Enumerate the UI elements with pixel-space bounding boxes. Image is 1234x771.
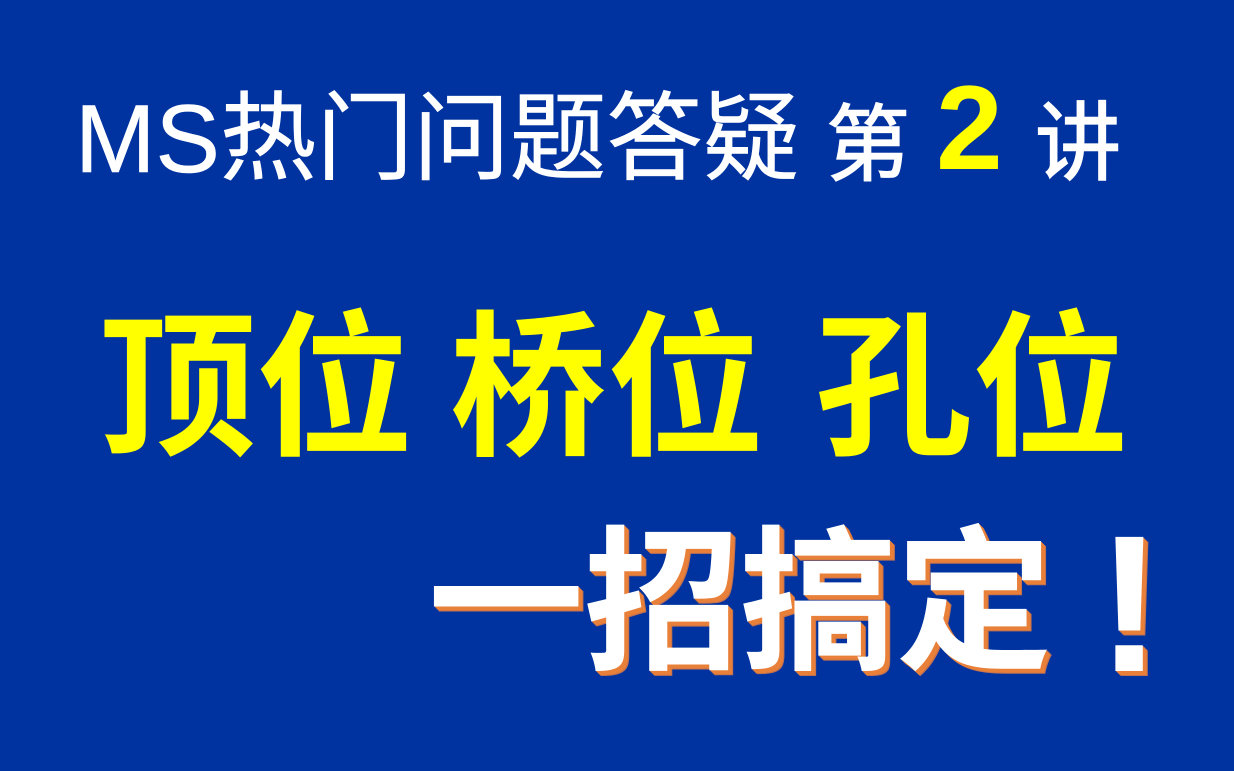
title: MS hot questions: MS热门问题答疑 <box>75 86 799 193</box>
title: lecture label 第: 第 <box>826 98 910 192</box>
title: lecture number 2: 2 <box>936 61 1003 195</box>
slogan with orange shadow: 一招搞定 <box>428 476 1052 702</box>
slogan exclamation mark: ! <box>1097 495 1162 713</box>
title: lecture label 讲: 讲 <box>1035 96 1121 192</box>
heading: top site: 顶位 <box>99 262 413 489</box>
heading: bridge site: 桥位 <box>450 262 764 489</box>
heading: hollow site: 孔位 <box>815 262 1129 489</box>
